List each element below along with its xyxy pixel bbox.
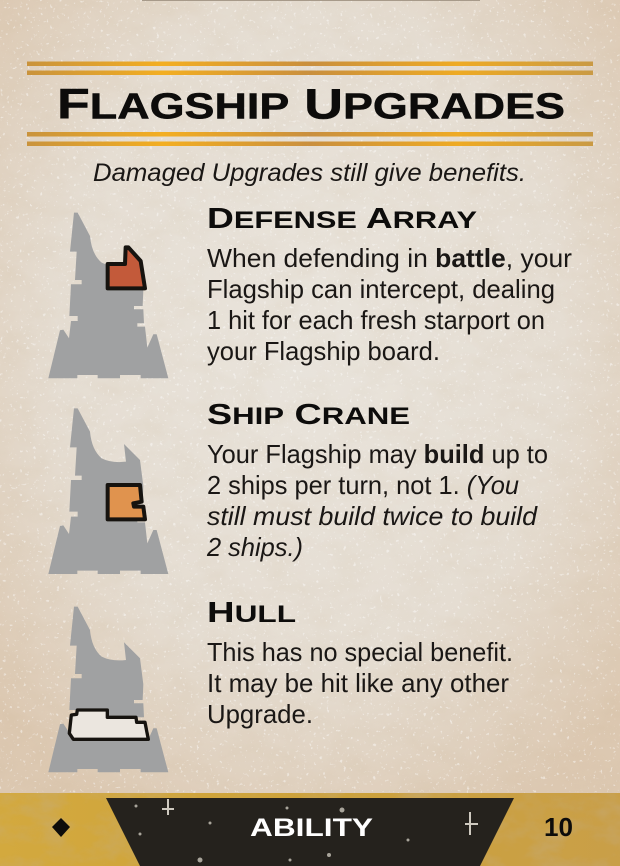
title: FLAGSHIP U PGRADES [57,80,565,128]
description: hull [207,637,513,729]
section: ship crane [206,399,548,562]
heading: defense array: DEFENSE A RRAY [207,203,477,235]
footer label: ABILITY [250,814,373,842]
icon: flagship with ship crane [48,408,168,574]
section: defense array [207,203,572,366]
description: defense array [207,243,572,366]
description: hull: Upgrade. [207,699,313,729]
description: defense array: Flagship can intercept, dealing [207,274,555,304]
description: hull: This has no special benefit. [207,637,513,667]
icon: diamond [52,818,70,837]
description: ship crane: still must build twice to build [207,501,539,531]
icon: flagship with defense array [48,213,168,378]
black trapezoid [106,798,514,866]
description: defense array: 1 hit for each fresh starport on [207,305,545,335]
description: defense array: When defending in battle, your [207,243,572,273]
page number: 10 [544,812,573,842]
description: defense array: your Flagship board. [207,336,440,366]
heading: hull: H ULL [207,597,296,629]
title banner [27,62,593,146]
description: ship crane [206,439,548,562]
description: ship crane: Your Flagship may build up to [207,439,548,469]
description: ship crane: 2 ships.) [206,532,303,562]
heading: ship crane: SHIP C RANE [207,399,410,431]
icon: flagship with hull [48,607,168,772]
section: hull [207,597,513,729]
description: ship crane: 2 ships per turn, not 1. (You [207,470,519,500]
description: hull: It may be hit like any other [207,668,509,698]
subtitle: Damaged Upgrades still give benefits. [93,159,526,187]
footer band [0,793,620,866]
